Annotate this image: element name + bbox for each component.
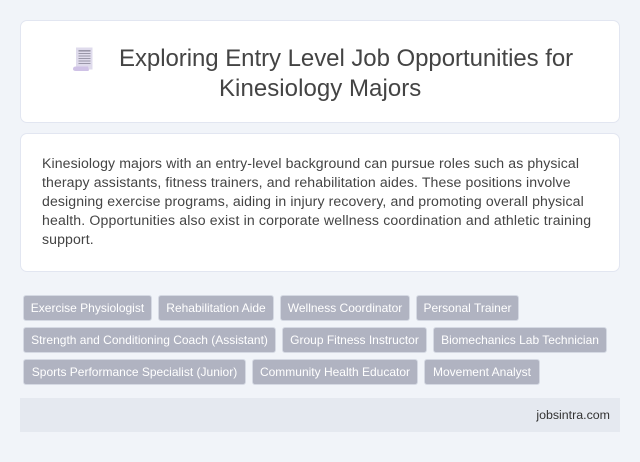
tag: Movement Analyst: [433, 365, 531, 379]
tag: [424, 359, 540, 385]
description text: Kinesiology majors with an entry-level background can pursue roles such as physical: [42, 155, 579, 171]
tag: [23, 327, 276, 353]
tag: Sports Performance Specialist (Junior): [32, 365, 237, 379]
description text: health. Opportunities also exist in corporate wellness coordination and athletic training: [42, 212, 591, 228]
description text: support.: [42, 231, 94, 247]
tag: [23, 295, 152, 321]
tag: Community Health Educator: [260, 365, 410, 379]
tag: Rehabilitation Aide: [166, 301, 266, 315]
tag: Strength and Conditioning Coach (Assistant): [31, 333, 268, 347]
tag: Personal Trainer: [423, 301, 512, 315]
description text: designing exercise programs, aiding in injury recovery, and promoting overall physical: [42, 193, 584, 209]
panel: title card: [20, 20, 620, 123]
panel: description: [20, 133, 620, 272]
tag: [158, 295, 274, 321]
tag: [23, 359, 246, 385]
title line 1: Exploring Entry Level Job Opportunities for: [119, 45, 573, 72]
icon: paper scroll document: [73, 48, 92, 71]
tag: [282, 327, 427, 353]
tag: [433, 327, 607, 353]
description text: [42, 155, 591, 247]
tag: [252, 359, 418, 385]
tag: Wellness Coordinator: [288, 301, 402, 315]
tag: [416, 295, 519, 321]
title line 2: Kinesiology Majors: [219, 75, 421, 102]
tag list: job roles: [23, 295, 607, 385]
tag: Biomechanics Lab Technician: [441, 333, 599, 347]
footer source text: jobsintra.com: [536, 408, 610, 422]
tag: [280, 295, 410, 321]
description text: therapy assistants, fitness trainers, and rehabilitation aides. These positions involve: [42, 174, 571, 190]
tag: Exercise Physiologist: [31, 301, 144, 315]
footer bar: [20, 398, 620, 432]
tag: Group Fitness Instructor: [290, 333, 419, 347]
